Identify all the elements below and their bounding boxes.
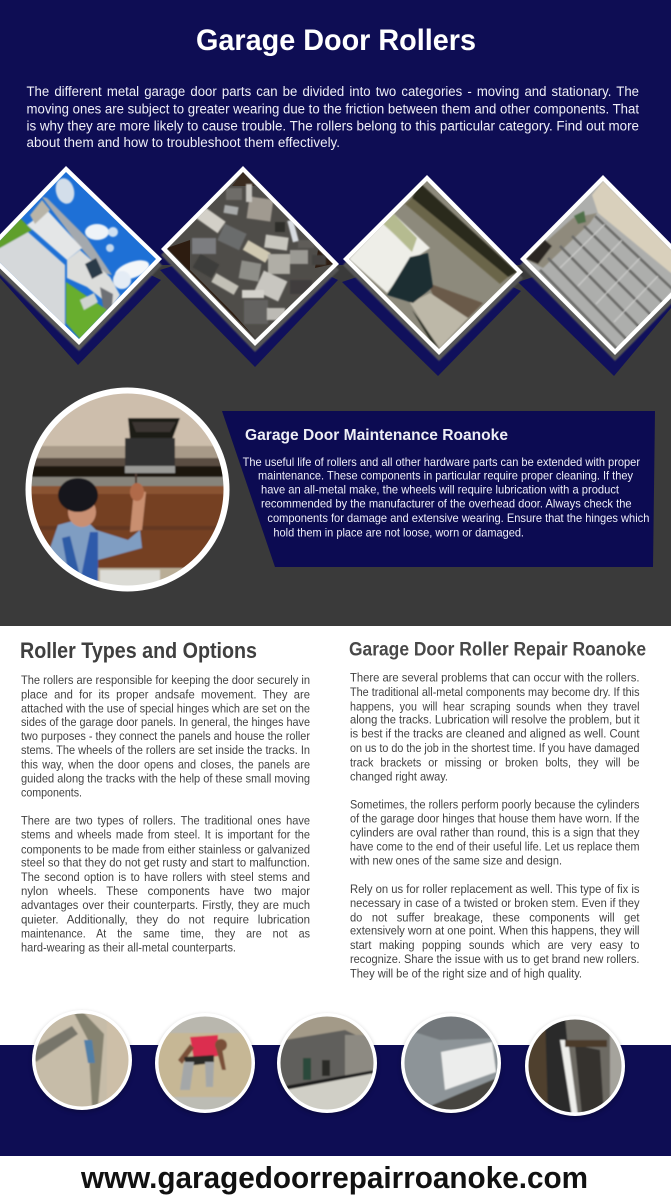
panel text: components for damage and extensive wearing. Ensure that the hinges which: [267, 511, 649, 525]
text block: roller types: nylon wheels. These components have two major: [21, 884, 310, 898]
text block: roller repair: necessary in case of a twisted or broken stem. Even if they: [350, 896, 640, 910]
text block: roller types: sides of the garage door panels. In general, the hinges have: [21, 715, 310, 729]
circular photos row: [30, 1010, 626, 1118]
text block: roller types: The rollers are responsible for keeping the door securely in: [21, 673, 310, 687]
text block: roller repair: They will be of the right size and of high quality.: [350, 966, 582, 980]
text block: roller repair: [349, 671, 640, 980]
navy chevrons behind photos: [0, 240, 671, 376]
photo diamond: technician at door: [340, 175, 525, 360]
text block: roller types: components.: [21, 786, 82, 800]
text block: roller types: The second option is to have rollers with steel stems and: [21, 870, 310, 884]
text block: roller repair: extensively worn at one point. When this happens, they will: [350, 924, 640, 938]
text block: roller types: stems and wheels made from steel. It is important for the: [21, 828, 310, 842]
text block: roller repair: The traditional all-metal components may become dry. If this: [350, 685, 640, 699]
website url: www.garagedoorrepairroanoke.com: [80, 1160, 588, 1195]
photo diamond: house and driveway: [0, 166, 162, 345]
text block: roller types: guided along the tracks with the help of these small moving: [21, 772, 310, 786]
text block: roller repair: Rely on us for roller replacement as well. This type of fix is: [350, 882, 640, 896]
text block: roller repair: start making popping sounds which are very easy to: [350, 938, 640, 952]
title: Garage Door Rollers: [196, 24, 476, 57]
circle photo: roller hardware close-up: [525, 1016, 626, 1118]
text block: roller types: attached with the use of special hinges which are set on the: [21, 701, 310, 715]
panel: garage door maintenance: [222, 411, 655, 567]
text block: roller types: steel so that they do not get rusty and start to malfunction.: [21, 856, 310, 870]
panel text: hold them in place are not loose, worn or damaged.: [273, 526, 524, 540]
text block: roller repair: of the garage door hinges that house them have worn. If the: [350, 811, 640, 825]
diamond shadows: [0, 172, 671, 361]
circular photo: technician pulling the opener cord: [26, 388, 230, 592]
intro text: about them and how to troubleshoot them effectively.: [26, 135, 340, 150]
text block: roller types: [21, 673, 310, 954]
text block: roller types: There are two types of rollers. The traditional ones have: [21, 814, 310, 828]
heading: roller types and options: Roller Types and Options: [20, 638, 257, 663]
photo diamond: metal brackets: [160, 165, 340, 350]
dark grey middle band: [0, 262, 671, 626]
panel text: The useful life of rollers and all other hardware parts can be extended with proper: [243, 455, 640, 469]
text block: roller types: place and for its proper andsafe movement. They are: [21, 687, 310, 701]
text block: roller types: components to be made from either stainless or galvanized: [21, 842, 310, 856]
intro text: The different metal garage door parts can be divided into two categories - moving and stationary. The: [26, 84, 639, 99]
text block: roller repair: changed right away.: [350, 770, 448, 784]
navy footer band: [0, 1045, 671, 1156]
panel text: have an all-metal make, the wheels will require lubrication with a product: [261, 482, 620, 496]
white lower section: [0, 626, 671, 1200]
text block: roller repair: recognize. Share the issue with us to get brand new rollers.: [350, 952, 640, 966]
text block: roller types: maintenance. At the same time, they are not as: [21, 926, 310, 940]
text block: roller repair: Sometimes, the rollers perform poorly because the cylinders: [350, 798, 640, 812]
text block: roller repair: is best if the tracks are cleaned and aligned as well. Count: [350, 727, 640, 741]
text block: roller types: this way, when the door opens and closes, the panels are: [21, 757, 310, 771]
circle photo: white door panel: [401, 1013, 501, 1115]
panel heading: Garage Door Maintenance Roanoke: [245, 427, 508, 444]
text block: roller repair: track brackets or missing or broken bolts, they will be: [350, 755, 640, 769]
panel text: maintenance. These components in particular require proper cleaning. If they: [258, 468, 633, 482]
navy header background: [0, 0, 671, 265]
intro text: moving ones are subject to greater wearing due to the friction between them and other components. That: [26, 102, 639, 116]
intro text: is why they are more likely to cause trouble. The rollers belong to this particular category. Find out more: [26, 118, 639, 134]
text block: roller types: hard-wearing as their all-metal counterparts.: [21, 940, 236, 954]
text block: roller repair: on us to do the job in the shortest time. If you have damaged: [350, 741, 640, 755]
circle photo: worker bending over: [155, 1013, 255, 1115]
text block: roller types: two purposes - they connect the panels and house the roller: [21, 729, 310, 743]
text block: roller repair: cylinders are oval rather than round, this is a sign that they: [350, 826, 640, 840]
panel text: [243, 455, 649, 540]
text block: roller repair: do not suffer breakage, these components will get: [350, 910, 640, 924]
circle photo: garage interior: [277, 1013, 380, 1115]
intro text: [26, 84, 639, 150]
text block: roller repair: with new ones of the same size and design.: [349, 854, 562, 868]
photo diamond: door panels from inside: [520, 175, 671, 360]
text block: roller types: stems. The wheels of the rollers are set inside the tracks. In: [21, 743, 310, 757]
text block: roller types: quieter. Additionally, they do not require lubrication: [21, 912, 310, 926]
text block: roller types: advantages over their counterparts. Firstly, they are much: [21, 898, 310, 912]
panel text: recommended by the manufacturer of the overhead door. Always check the: [261, 496, 632, 510]
text block: roller repair: There are several problems that can occur with the rollers.: [350, 671, 640, 685]
text block: roller repair: have come to the end of their useful life. Let us replace them: [350, 840, 640, 854]
circle photo: door edge and track: [30, 1010, 133, 1112]
text block: roller repair: happens, you will hear scraping sounds when they travel: [350, 699, 640, 713]
text block: roller repair: along the tracks. Lubrication will resolve the problem, but it: [350, 713, 640, 727]
